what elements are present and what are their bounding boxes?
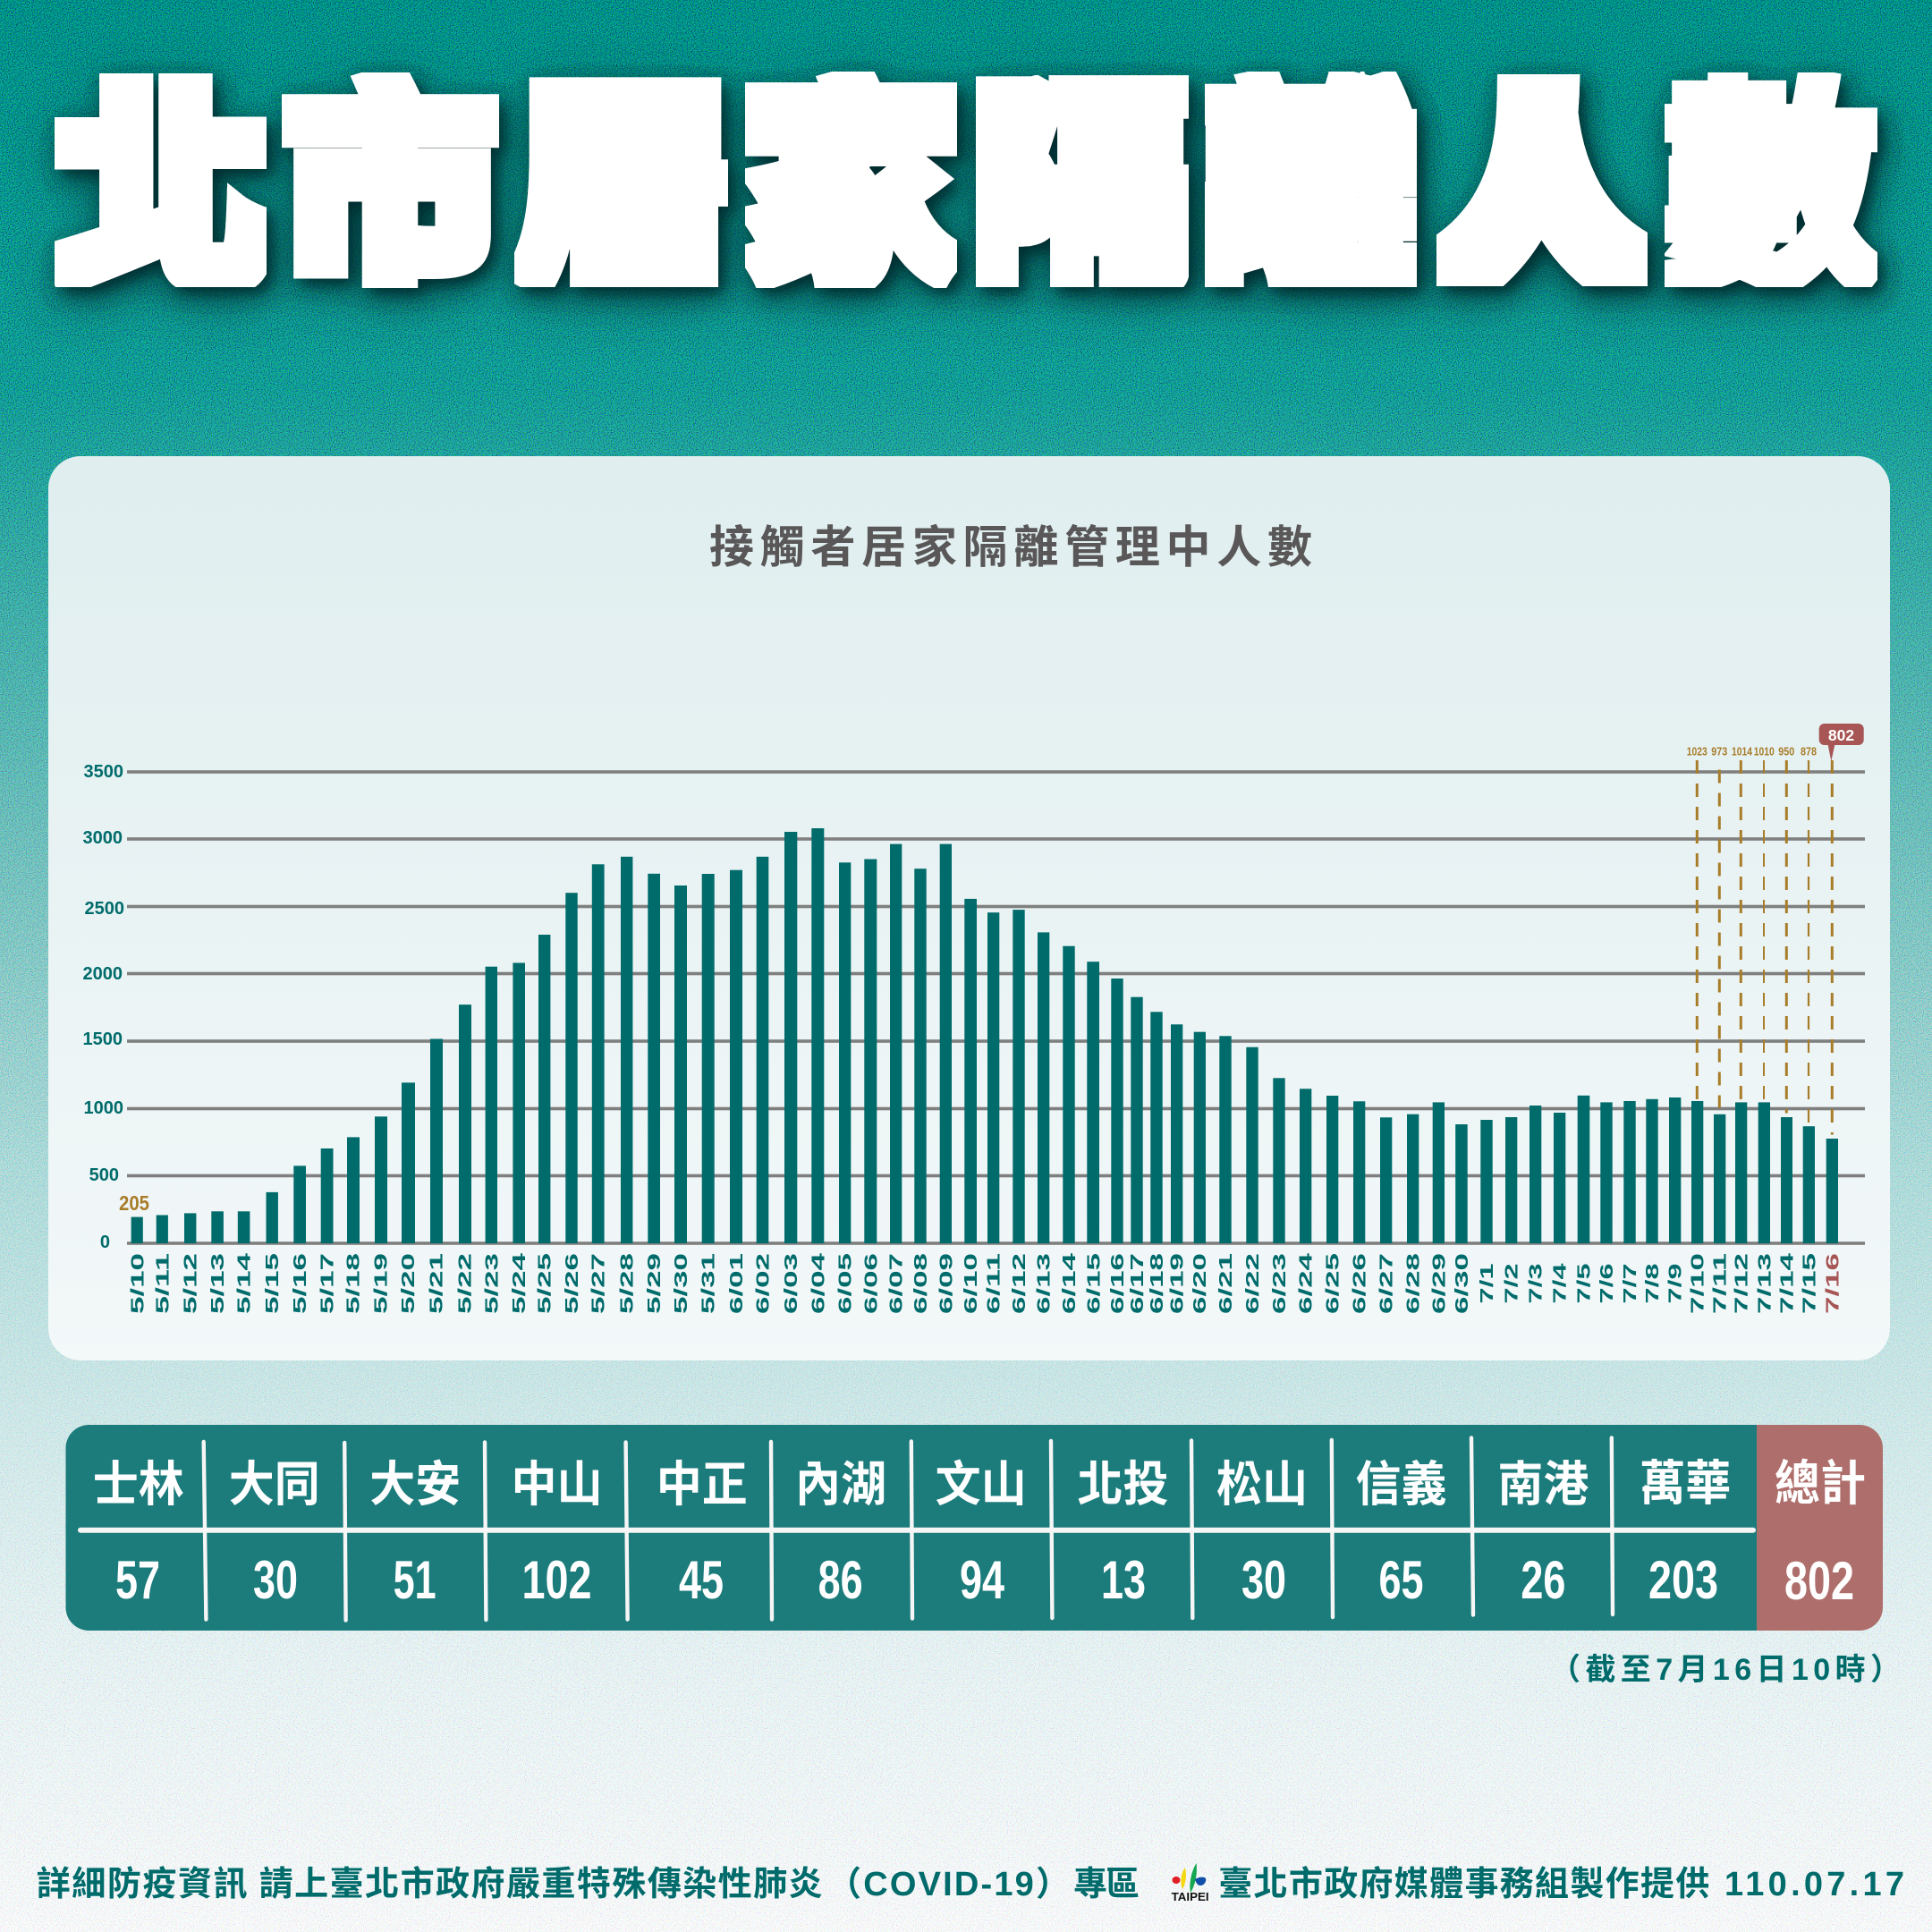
- district names: 大同: [229, 1445, 320, 1515]
- x axis date labels: 5/13: [208, 1253, 228, 1314]
- x axis date labels: 5/25: [536, 1253, 555, 1314]
- district counts: 802: [1784, 1551, 1854, 1611]
- x axis date labels: 6/04: [809, 1251, 828, 1314]
- district names: 南港: [1497, 1445, 1589, 1515]
- district names: 總計: [1775, 1444, 1866, 1514]
- x axis date labels: 5/27: [589, 1253, 609, 1314]
- district counts: 94: [960, 1550, 1004, 1610]
- x axis date labels: 7/3: [1527, 1263, 1546, 1304]
- y axis labels: 1000: [84, 1098, 123, 1118]
- x axis date labels: 5/24: [510, 1251, 530, 1314]
- panel: chart card: [48, 456, 1890, 1360]
- title: 離: [1199, 7, 1424, 334]
- x axis date labels: 7/5: [1574, 1263, 1594, 1304]
- x axis date labels: 5/29: [645, 1253, 665, 1314]
- dashed callouts for recent days: 950: [1778, 746, 1794, 758]
- x axis date labels: 6/22: [1243, 1253, 1263, 1314]
- x axis date labels: 7/15: [1800, 1253, 1819, 1314]
- x axis date labels: 7/7: [1621, 1263, 1640, 1304]
- x axis date labels: 5/15: [263, 1253, 283, 1314]
- district counts: 45: [679, 1550, 724, 1610]
- dashed callouts for recent days: 1023: [1687, 746, 1707, 758]
- total column background: [1757, 1425, 1883, 1631]
- x axis date labels: 5/17: [318, 1253, 337, 1314]
- title: [48, 7, 1884, 334]
- y axis labels: 500: [89, 1165, 119, 1185]
- footer: source text: 請上臺北市政府嚴重特殊傳染性肺炎: [259, 1866, 823, 1903]
- x axis date labels: 5/22: [456, 1253, 476, 1314]
- x axis date labels: 7/12: [1733, 1253, 1752, 1314]
- x axis date labels: 5/20: [399, 1253, 419, 1314]
- x axis date labels: 5/12: [182, 1253, 201, 1314]
- x axis date labels: 5/30: [672, 1253, 691, 1314]
- footer: source text: （COVID-19）: [827, 1866, 1070, 1903]
- x axis date labels: 7/8: [1643, 1263, 1663, 1304]
- footer: producer credit: 110.07.17: [1724, 1866, 1904, 1903]
- x axis date labels: 7/2: [1503, 1263, 1522, 1304]
- x axis date labels: 5/19: [372, 1253, 392, 1314]
- district counts: 30: [253, 1550, 298, 1610]
- x axis date labels: 5/23: [482, 1253, 502, 1314]
- district names: 內湖: [795, 1445, 886, 1515]
- district counts: 86: [818, 1550, 863, 1610]
- y axis labels: 2500: [84, 899, 124, 919]
- x axis date labels: 6/12: [1010, 1253, 1030, 1314]
- title: 北: [48, 7, 274, 334]
- x axis date labels: 6/13: [1035, 1253, 1055, 1314]
- district names: 信義: [1356, 1445, 1447, 1515]
- district counts: 102: [522, 1550, 592, 1610]
- title: 市: [278, 7, 504, 334]
- district names: 士林: [93, 1445, 184, 1515]
- x axis date labels: 6/28: [1404, 1253, 1424, 1314]
- x axis date labels: 5/16: [291, 1253, 310, 1314]
- y axis labels: 3000: [82, 828, 123, 848]
- x axis date labels: 6/09: [936, 1253, 956, 1314]
- x axis date labels: 6/17: [1128, 1253, 1148, 1314]
- district names: 北投: [1077, 1445, 1168, 1515]
- icon: Taipei logo: [1172, 1863, 1209, 1903]
- x axis date labels: 6/21: [1216, 1253, 1236, 1314]
- x axis date labels: 5/11: [153, 1253, 173, 1314]
- district counts: 30: [1241, 1550, 1286, 1610]
- district counts: 26: [1521, 1550, 1565, 1610]
- footer: source text: 專區: [1073, 1866, 1140, 1903]
- footer: producer credit: 臺北市政府媒體事務組製作提供: [1218, 1866, 1709, 1903]
- x axis date labels: 6/29: [1429, 1253, 1449, 1314]
- x axis date labels: 6/07: [887, 1253, 907, 1314]
- y axis labels: 0: [100, 1233, 110, 1252]
- dashed callouts for recent days: 1014: [1732, 746, 1752, 758]
- x axis date labels: 5/31: [699, 1253, 719, 1314]
- x axis date labels: 6/30: [1453, 1253, 1472, 1314]
- district counts: 65: [1379, 1550, 1424, 1610]
- district names: 中山: [512, 1445, 603, 1515]
- x axis date labels: 6/16: [1108, 1253, 1128, 1314]
- y axis labels: 2000: [82, 964, 123, 984]
- district counts: 57: [115, 1550, 160, 1610]
- x axis date labels: 5/21: [428, 1253, 447, 1314]
- title: 隔: [970, 7, 1195, 334]
- y axis labels: 3500: [84, 762, 123, 782]
- y axis labels: 1500: [82, 1030, 123, 1049]
- dashed callouts for recent days: 973: [1711, 746, 1727, 758]
- x axis date labels: 5/10: [128, 1253, 148, 1314]
- x axis date labels: 5/18: [344, 1253, 364, 1314]
- title: 數: [1658, 7, 1884, 334]
- dashed callouts for recent days: 878: [1801, 746, 1817, 758]
- x axis date labels: 6/02: [753, 1253, 773, 1314]
- x axis date labels: 6/08: [911, 1253, 931, 1314]
- district counts: 51: [394, 1550, 436, 1610]
- district names: [93, 1444, 1866, 1515]
- bars: [131, 828, 1838, 1243]
- title: 人: [1429, 7, 1655, 334]
- title: 居: [509, 7, 734, 334]
- dashed callouts for recent days: [1687, 746, 1832, 1135]
- x axis date labels: 6/24: [1297, 1251, 1317, 1314]
- table rules: [80, 1438, 1753, 1621]
- title: 家: [739, 7, 964, 334]
- x axis date labels: 7/16: [1823, 1253, 1843, 1314]
- district names: 文山: [936, 1445, 1027, 1515]
- district counts: 203: [1648, 1550, 1718, 1610]
- footer: source text: [37, 1866, 1140, 1903]
- panel: district table: [66, 1425, 1883, 1631]
- table background: [66, 1425, 1757, 1631]
- icon: Taipei logo: TAIPEI: [1172, 1890, 1209, 1903]
- x axis date labels: 7/14: [1777, 1251, 1797, 1314]
- x axis date labels: 6/06: [861, 1253, 881, 1314]
- date note: （截至7月16日10時）: [1550, 1653, 1901, 1687]
- x axis date labels: 6/18: [1148, 1253, 1167, 1314]
- x axis date labels: 7/9: [1666, 1263, 1686, 1304]
- district names: 大安: [369, 1445, 461, 1515]
- footer: source text: 詳細防疫資訊: [37, 1866, 248, 1903]
- x axis date labels: 7/6: [1597, 1263, 1617, 1304]
- x axis date labels: 6/15: [1084, 1253, 1104, 1314]
- x axis date labels: 5/14: [234, 1251, 254, 1314]
- x axis date labels: 6/01: [727, 1253, 747, 1314]
- grid lines: [127, 770, 1865, 1245]
- x axis date labels: 6/25: [1324, 1253, 1343, 1314]
- x axis date labels: 7/13: [1755, 1253, 1775, 1314]
- x axis date labels: 6/03: [782, 1253, 801, 1314]
- x axis date labels: 6/20: [1191, 1253, 1210, 1314]
- chart title: 接觸者居家隔離管理中人數: [709, 512, 1312, 576]
- x axis date labels: 6/19: [1168, 1253, 1188, 1314]
- x axis date labels: 6/23: [1270, 1253, 1290, 1314]
- x axis date labels: 6/27: [1377, 1253, 1397, 1314]
- x axis date labels: 7/10: [1689, 1253, 1708, 1314]
- y axis labels: [82, 762, 124, 1252]
- x axis date labels: 7/1: [1478, 1263, 1497, 1304]
- district names: 松山: [1216, 1445, 1308, 1515]
- callout: latest value 802: 802: [1828, 726, 1854, 744]
- callout: latest value 802: [1819, 724, 1864, 761]
- x axis date labels: 5/28: [618, 1253, 638, 1314]
- bar chart: [82, 724, 1865, 1314]
- dashed callouts for recent days: 1010: [1754, 746, 1775, 758]
- first bar value label: 205: [119, 1191, 149, 1215]
- x axis date labels: 6/05: [836, 1253, 856, 1314]
- district names: 中正: [657, 1445, 748, 1515]
- x axis date labels: 7/4: [1551, 1262, 1571, 1304]
- x axis date labels: 6/14: [1060, 1251, 1080, 1314]
- district names: 萬華: [1640, 1444, 1731, 1514]
- x axis date labels: 7/11: [1711, 1253, 1731, 1314]
- x axis date labels: [128, 1251, 1843, 1314]
- district counts: [115, 1550, 1854, 1611]
- x axis date labels: 6/26: [1351, 1253, 1370, 1314]
- x axis date labels: 5/26: [563, 1253, 582, 1314]
- x axis date labels: 6/10: [962, 1253, 981, 1314]
- x axis date labels: 6/11: [985, 1253, 1004, 1314]
- district counts: 13: [1101, 1550, 1146, 1610]
